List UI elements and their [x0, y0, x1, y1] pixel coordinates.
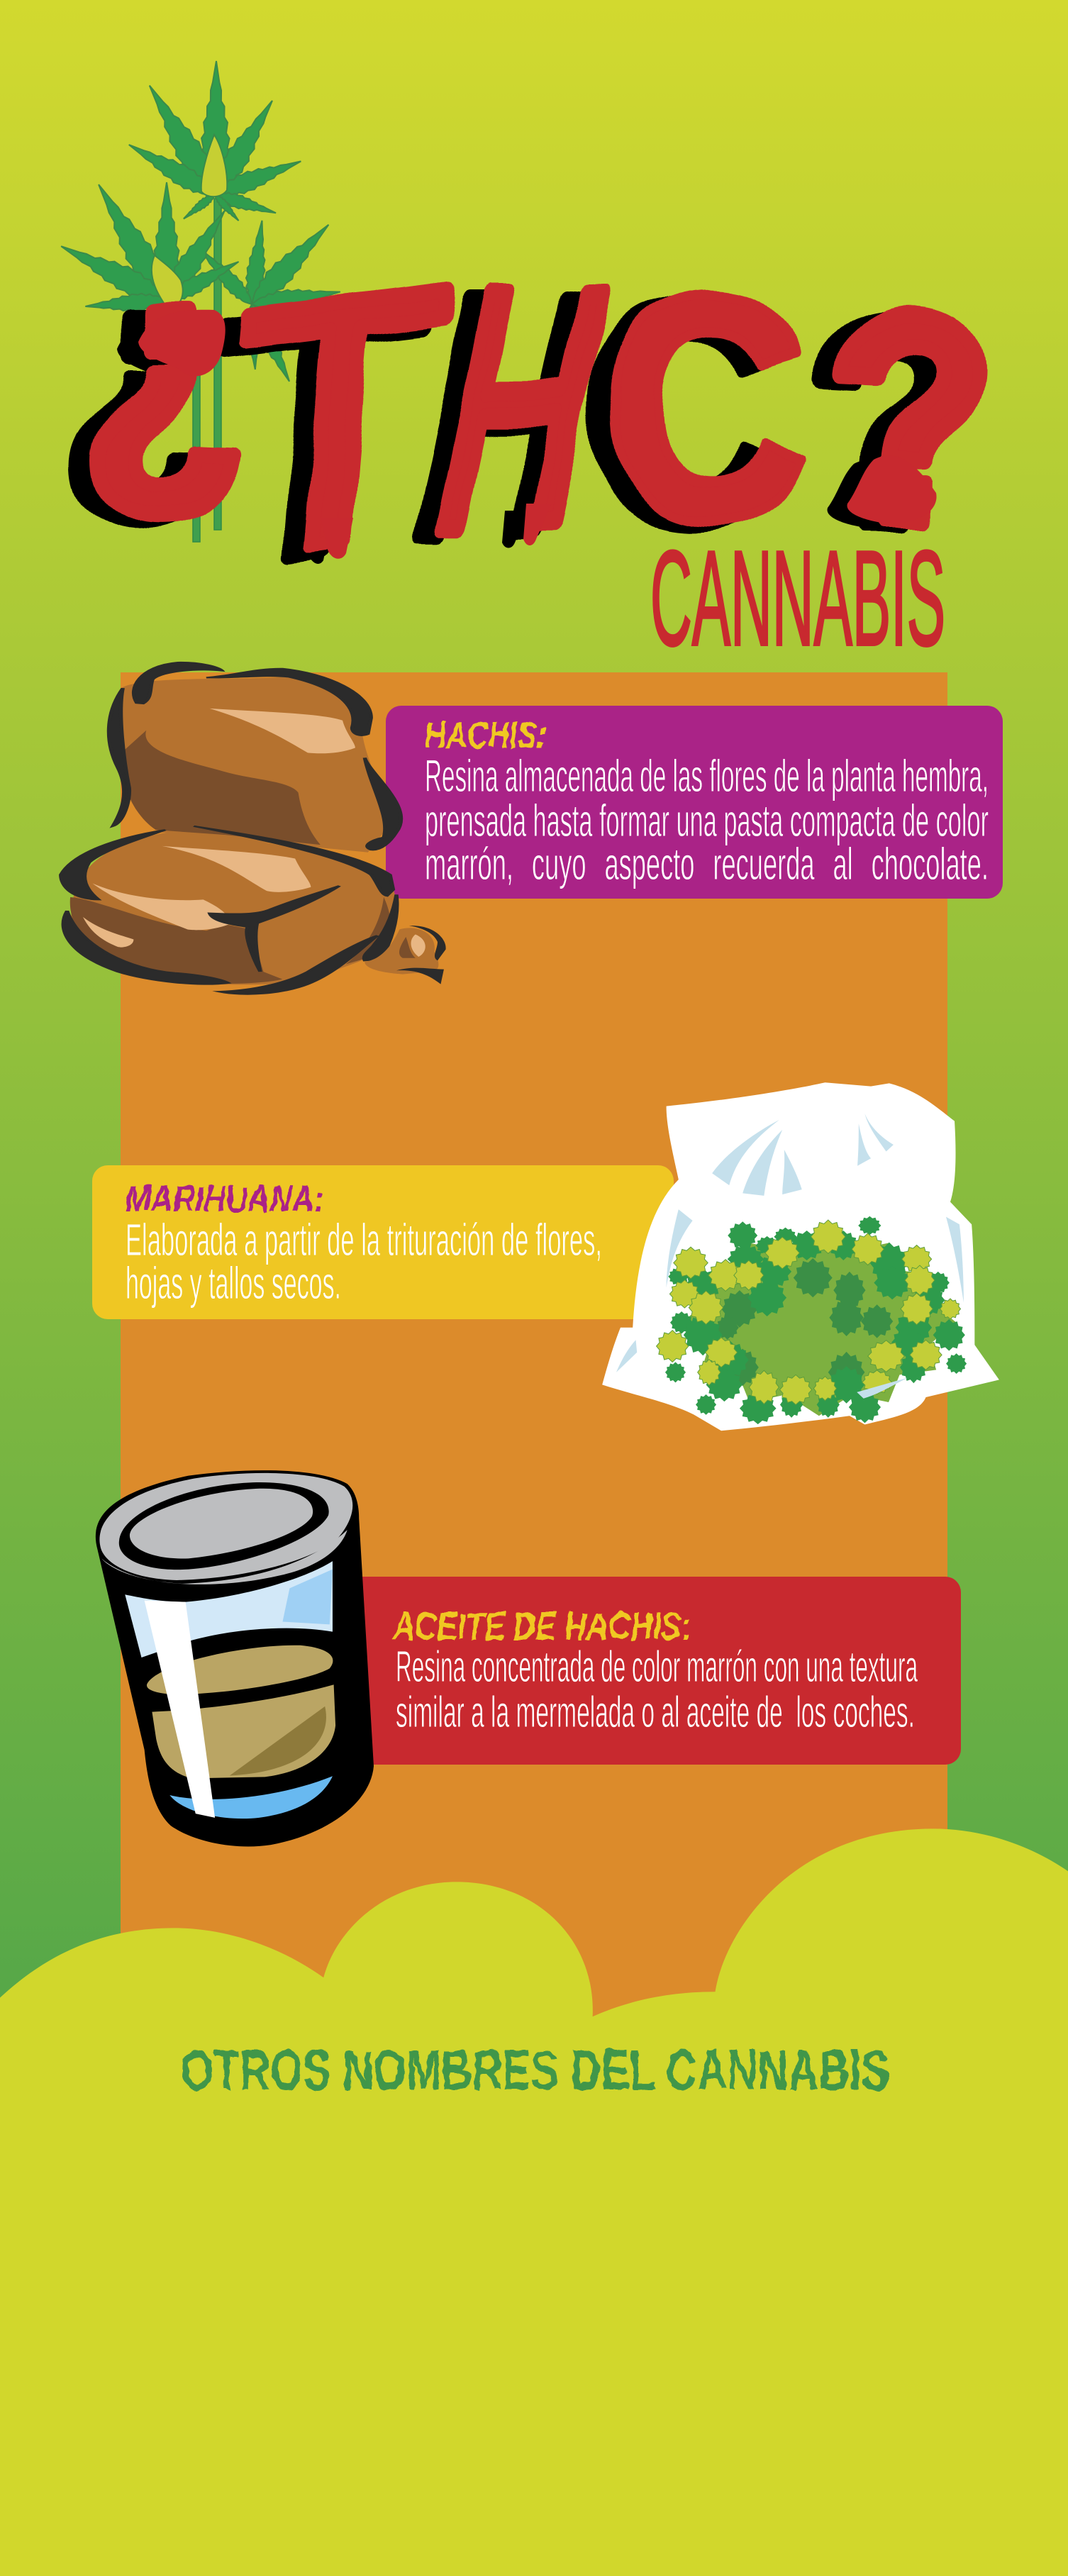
icon: cannabis plant [55, 61, 342, 542]
text: marihuana description: Elaborada a partir de la trituración de flores, [126, 1214, 602, 1265]
panel: hachis [386, 706, 1003, 899]
icon: bag of marijuana [602, 1082, 999, 1431]
text: aceite description [396, 1643, 918, 1737]
panel: orange background [121, 672, 947, 2162]
title shadow: C [582, 234, 789, 592]
text: marihuana description [126, 1214, 602, 1309]
text: marihuana description: hojas y tallos secos. [126, 1258, 341, 1309]
heading: aceite de hachis: ACEITE DE HACHIS: [391, 1604, 691, 1648]
title shadow: H [388, 227, 616, 604]
title letters: ? [831, 252, 991, 584]
hills background [0, 1828, 1068, 2576]
title [64, 197, 991, 639]
text: hachis description [425, 750, 989, 889]
title shadow: T [192, 223, 443, 639]
title letters: T [213, 213, 463, 629]
icon: glass jar of hash oil [96, 1470, 374, 1846]
title letters [84, 197, 991, 629]
panel: marihuana [92, 1165, 674, 1319]
heading: marihuana: MARIHUANA: [126, 1179, 324, 1220]
title shadow: ¿ [64, 203, 224, 535]
panel: aceite de hachis [340, 1577, 961, 1765]
title letters: C [603, 228, 810, 586]
title letters: ¿ [84, 197, 245, 530]
title shadow [64, 203, 971, 639]
heading: hachis: HACHIS: [425, 715, 547, 756]
title shadow: ? [811, 257, 971, 589]
icon: hash block [61, 662, 446, 994]
title letters: H [408, 220, 637, 596]
